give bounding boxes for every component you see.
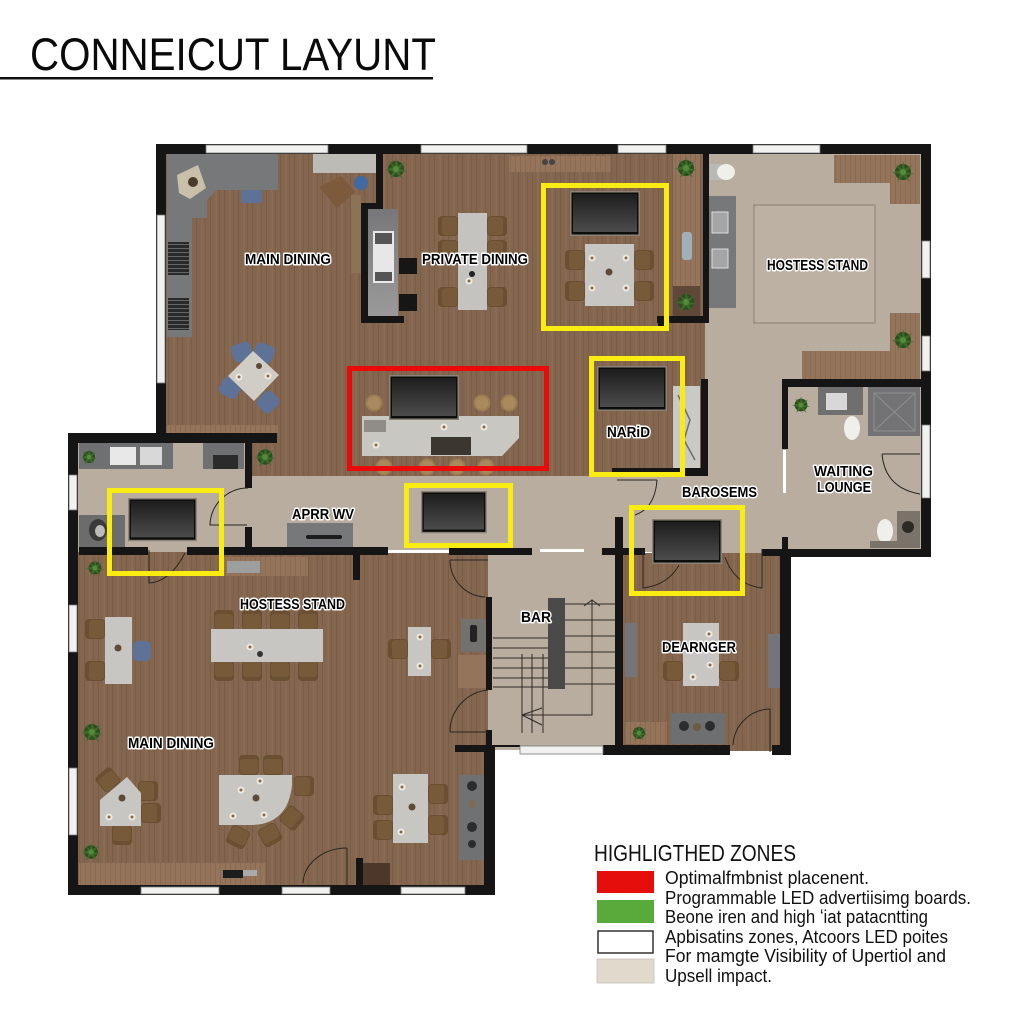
legend text: Upsell impact. xyxy=(665,966,772,986)
room labels: LOUNGE xyxy=(817,479,871,496)
panel: upper left main dining furniture xyxy=(167,154,376,433)
panel: staircase xyxy=(493,598,617,733)
room labels: MAIN DINING xyxy=(245,251,331,268)
legend text: Beone iren and high ʻiat patacntting xyxy=(665,907,928,927)
room labels: WAITING xyxy=(814,463,873,480)
legend text xyxy=(665,868,971,986)
panel: door swings xyxy=(149,454,920,885)
tv: hallway xyxy=(421,491,487,533)
room labels: APRR WV xyxy=(292,506,354,523)
room labels: BAROSEMS xyxy=(682,484,757,501)
panel: lower right room furniture xyxy=(625,623,780,744)
panel: private dining furniture xyxy=(368,156,611,316)
room labels: HOSTESS STAND xyxy=(767,257,868,274)
tv: lower hall xyxy=(652,519,722,564)
floors xyxy=(72,148,927,890)
tv: private dining booth xyxy=(570,191,640,236)
long dining table xyxy=(211,610,323,681)
panel: right side of dining room xyxy=(673,154,700,316)
legend: highlighted zones xyxy=(594,840,971,986)
panel: left service room fixtures xyxy=(79,443,353,547)
tv: left room xyxy=(128,498,197,541)
panel: bar counter with stools xyxy=(362,394,519,476)
tv: right booth xyxy=(597,366,667,411)
legend heading: HIGHLIGTHED ZONES xyxy=(594,840,796,866)
legend text: Optimalfmbnist placenent. xyxy=(665,868,869,888)
legend text: For mamgte Visibility of Upertiol and xyxy=(665,946,946,966)
legend text: Apbisatins zones, Atcoors LED poites xyxy=(665,927,948,947)
legend swatches xyxy=(597,871,654,983)
panel: lower main dining furniture xyxy=(79,557,486,885)
title: CONNEICUT LAYUNT xyxy=(30,29,436,80)
angled table xyxy=(94,766,161,845)
room labels: BAR xyxy=(521,609,551,626)
legend text: Programmable LED advertiisimg boards. xyxy=(665,888,971,908)
tv: central bar xyxy=(389,375,459,420)
highlighted zone: red optimal placement xyxy=(350,368,546,468)
rounded table xyxy=(219,755,314,850)
panel: windows and glazed gaps xyxy=(69,145,930,894)
panel: waiting lounge fixtures xyxy=(792,387,920,548)
room labels: DEARNGER xyxy=(662,639,736,656)
room labels xyxy=(128,251,873,752)
small table right xyxy=(388,619,486,688)
highlighted zones: yellow LED boards xyxy=(110,186,742,594)
panel: booth table xyxy=(565,244,654,306)
rectangular table right xyxy=(373,774,448,843)
panel: exterior and interior walls xyxy=(68,144,931,895)
dining table left xyxy=(85,617,151,684)
room labels: NARiD xyxy=(607,424,650,441)
room labels: MAIN DINING xyxy=(128,735,214,752)
panel: marble side counter xyxy=(673,386,700,468)
panel: upper right open hall fixtures xyxy=(708,155,920,379)
room labels: HOSTESS STAND xyxy=(240,596,345,613)
room labels: PRIVATE DINING xyxy=(422,251,528,268)
